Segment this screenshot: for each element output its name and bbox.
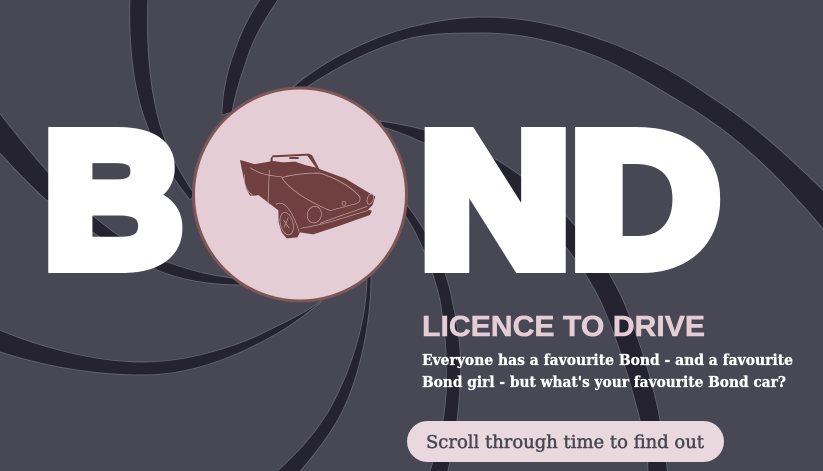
letter D: D [570, 95, 720, 306]
letter O, covered by the medallion: O [230, 95, 377, 306]
door line [268, 170, 269, 204]
headlight [305, 205, 323, 225]
nose line [320, 206, 367, 223]
button pill [407, 421, 724, 462]
windscreen opening [273, 156, 316, 168]
intro text [422, 352, 793, 391]
bonnet outline [282, 173, 360, 211]
interior and seats [253, 161, 315, 176]
car body silhouette [240, 154, 375, 238]
blade: lower left [0, 300, 322, 375]
rear wheel arch [244, 174, 253, 195]
heading: BOND [44, 95, 720, 306]
button label: Scroll through time to find out [426, 433, 704, 453]
letter B: B [44, 95, 183, 306]
blade: bottom centre [274, 270, 371, 471]
badge [342, 201, 346, 205]
subheading: LICENCE TO DRIVE [422, 311, 705, 343]
intro line 1: Everyone has a favourite Bond - and a favourite [422, 352, 793, 369]
front wheel [278, 211, 296, 236]
front wheel arch [276, 203, 299, 232]
icon: convertible car [240, 154, 375, 238]
body highlight lines [244, 168, 375, 236]
medallion circle [194, 88, 406, 301]
side light [366, 193, 375, 205]
intro line 2: Bond girl - but what's your favourite Bond car? [422, 374, 786, 391]
blade: large top arc [293, 17, 823, 232]
belt line [250, 168, 282, 177]
blade: top centre [222, 0, 280, 115]
windscreen mirror [289, 157, 299, 159]
blade: left behind B [0, 110, 240, 285]
blade: centre right [405, 205, 461, 471]
call to action button [407, 421, 724, 462]
letter N: N [420, 95, 571, 306]
blade: top left [130, 0, 195, 200]
bumper line [301, 210, 368, 228]
blade: right sweeping down [380, 121, 668, 471]
wheel hub [283, 218, 289, 228]
